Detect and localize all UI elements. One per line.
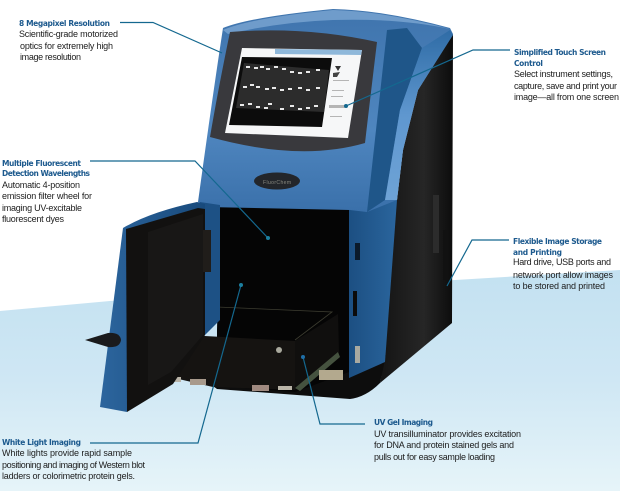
callout: UV Gel Imaging: UV transilluminator provides excitation [374, 429, 521, 439]
callout: Flexible Image Storage and Printing: Hard drive, USB ports and [513, 257, 611, 267]
callout: Multiple Fluorescent Detection Wavelengths: Automatic 4-position [2, 180, 80, 190]
open door [100, 202, 211, 412]
callout: UV Gel Imaging: UV Gel Imaging [374, 418, 433, 427]
callout: Flexible Image Storage and Printing: to be stored and printed [513, 281, 605, 291]
callout: 8 Megapixel Resolution: optics for extremely high [20, 41, 113, 51]
instrument [85, 9, 453, 412]
callout: UV Gel Imaging [301, 355, 521, 462]
gel bands [240, 66, 320, 110]
callout: White Light Imaging: White Light Imaging [2, 438, 81, 447]
callout: Simplified Touch Screen Control: Control [514, 59, 543, 68]
top edge highlight [223, 10, 450, 34]
callout: White Light Imaging: ladders or colorimetric protein gels. [2, 471, 135, 481]
callout: 8 Megapixel Resolution: image resolution [20, 52, 81, 62]
callout: Multiple Fluorescent Detection Wavelengths: fluorescent dyes [2, 214, 64, 224]
chamber opening [168, 206, 349, 392]
callout: Multiple Fluorescent Detection Wavelengths: Multiple Fluorescent [2, 159, 81, 168]
callout: Multiple Fluorescent Detection Wavelengths [2, 159, 270, 240]
callout: Simplified Touch Screen Control: capture, save and print your [514, 81, 617, 91]
light side band [385, 30, 453, 200]
blue strip beside chamber [200, 202, 220, 340]
callout: White Light Imaging: White lights provide rapid sample [2, 448, 132, 458]
callout: Flexible Image Storage and Printing: network port allow images [513, 270, 614, 280]
upper body silhouette [198, 9, 453, 212]
callout: White Light Imaging [2, 283, 243, 481]
touch screen [225, 48, 362, 138]
brand badge [254, 172, 300, 190]
blue lower frame [349, 200, 397, 378]
callout: Multiple Fluorescent Detection Wavelengths: Detection Wavelengths [2, 169, 91, 178]
callout: Flexible Image Storage and Printing: Flexible Image Storage [513, 237, 602, 246]
callout: Simplified Touch Screen Control [344, 48, 619, 108]
black base [205, 355, 386, 399]
callout: Flexible Image Storage and Printing [447, 237, 614, 291]
black side housing [380, 34, 453, 383]
callout: Simplified Touch Screen Control: Simplified Touch Screen [514, 48, 606, 57]
callout: UV Gel Imaging: for DNA and protein stained gels and [374, 440, 514, 450]
callout: Multiple Fluorescent Detection Wavelengths: imaging UV-excitable [2, 203, 82, 213]
screen bezel [210, 30, 377, 151]
callout: 8 Megapixel Resolution: 8 Megapixel Resolution [19, 19, 110, 28]
callout: Simplified Touch Screen Control: Select instrument settings, [514, 69, 613, 79]
sample drawer [168, 307, 343, 391]
door handle [85, 333, 121, 347]
callout: Multiple Fluorescent Detection Wavelengths: emission filter wheel for [2, 191, 92, 201]
callout: 8 Megapixel Resolution [19, 19, 222, 62]
callout: Flexible Image Storage and Printing: and Printing [513, 248, 562, 257]
dark side facet [367, 28, 422, 212]
brand badge: FluorChem [263, 180, 291, 186]
side ports [353, 195, 447, 363]
callout: UV Gel Imaging: pulls out for easy sample loading [374, 452, 495, 462]
callout: 8 Megapixel Resolution: Scientific-grade motorized [19, 29, 118, 39]
callout: Simplified Touch Screen Control: image—all from one screen [514, 92, 619, 102]
callout: White Light Imaging: positioning and imaging of Western blot [2, 460, 145, 470]
